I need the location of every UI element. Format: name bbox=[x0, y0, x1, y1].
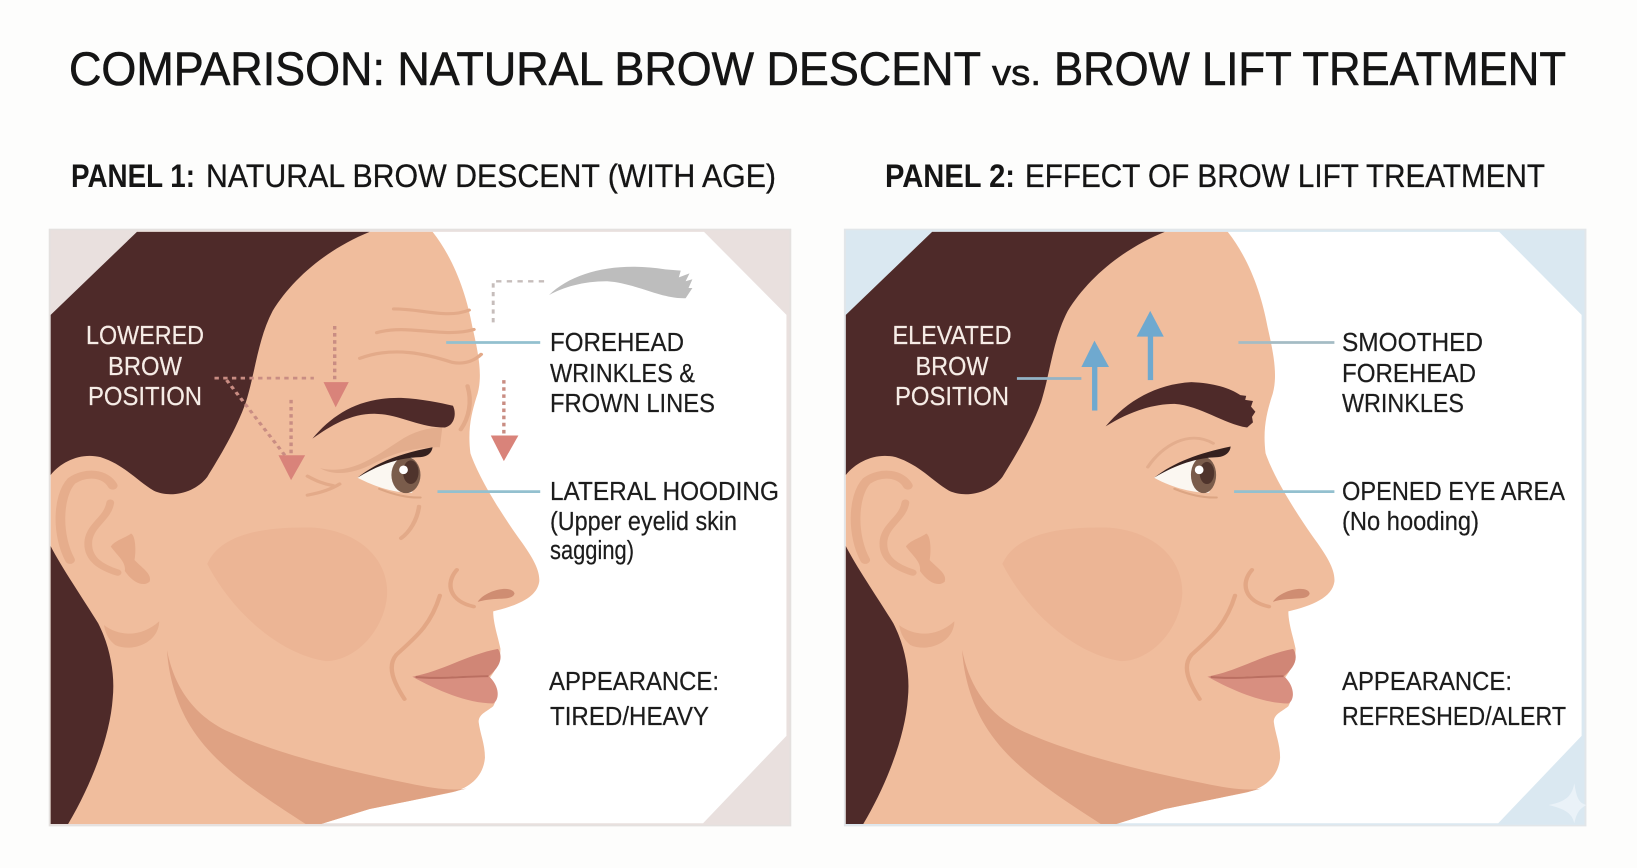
label: forehead wrinkles and frown lines: FROWN LINES bbox=[550, 390, 715, 418]
eyebrow bbox=[312, 398, 455, 439]
eye white bbox=[1154, 457, 1209, 493]
panel 1 white area bbox=[51, 232, 786, 823]
face skin bbox=[51, 232, 539, 824]
sparkle mark bbox=[1549, 783, 1586, 823]
label: smoothed forehead wrinkles bbox=[1342, 329, 1483, 418]
title: BROW LIFT TREATMENT bbox=[1054, 42, 1566, 95]
lower lid bbox=[379, 489, 420, 498]
neck shadow bbox=[167, 650, 467, 824]
pupil bbox=[403, 460, 419, 484]
label: elevated brow position: ELEVATED bbox=[892, 322, 1012, 350]
ear outer fold bbox=[60, 475, 113, 560]
label: forehead wrinkles and frown lines: FOREHEAD bbox=[550, 329, 684, 357]
lower hair bbox=[51, 546, 113, 824]
lifted eyebrow bbox=[1106, 382, 1255, 428]
highlight bbox=[399, 465, 408, 474]
face illustration bbox=[846, 232, 1334, 824]
nasolabial fold bbox=[392, 596, 440, 699]
label: smoothed forehead wrinkles: WRINKLES bbox=[1342, 390, 1464, 418]
panel 2: effect of brow lift bbox=[845, 229, 1586, 826]
face illustration bbox=[51, 232, 539, 824]
label: lateral hooding: sagging) bbox=[550, 537, 634, 565]
cheek bbox=[207, 527, 387, 661]
panel 1 background bbox=[50, 229, 790, 826]
panel 1 labels bbox=[86, 322, 779, 731]
title: vs. bbox=[992, 52, 1041, 93]
pupil bbox=[1200, 462, 1214, 484]
heading: panel 2: PANEL 2: bbox=[885, 158, 1015, 194]
nostril bbox=[478, 589, 515, 602]
panel 2 white area bbox=[846, 232, 1582, 823]
eye bbox=[357, 447, 433, 498]
label: opened eye area: (No hooding) bbox=[1342, 508, 1479, 536]
lower lip bbox=[412, 676, 498, 703]
panel 1: natural brow descent bbox=[50, 229, 790, 826]
label: lateral hooding bbox=[550, 478, 779, 565]
iris bbox=[1191, 457, 1216, 493]
label: opened eye area: OPENED EYE AREA bbox=[1342, 478, 1565, 506]
label: appearance refreshed/alert: APPEARANCE: bbox=[1342, 668, 1512, 696]
grey dashed connector bbox=[493, 281, 544, 325]
eye white bbox=[357, 457, 412, 493]
eyeliner bbox=[1154, 447, 1231, 478]
red arrows and dotted guides bbox=[214, 326, 504, 455]
label: appearance tired/heavy: TIRED/HEAVY bbox=[550, 703, 709, 731]
highlight bbox=[1195, 465, 1204, 474]
blue up arrows bbox=[1081, 311, 1164, 411]
panel 2 labels bbox=[892, 322, 1566, 731]
label: elevated brow position: BROW bbox=[916, 353, 988, 381]
leader lines bbox=[1017, 343, 1334, 492]
label: appearance tired/heavy: APPEARANCE: bbox=[549, 668, 719, 696]
upper eyelid hooding bbox=[320, 428, 442, 473]
ear inner fold bbox=[88, 503, 118, 573]
nose lines bbox=[450, 570, 474, 607]
panel 2 background bbox=[845, 229, 1585, 826]
label: forehead wrinkles and frown lines bbox=[550, 329, 715, 418]
title: COMPARISON: NATURAL BROW DESCENT bbox=[69, 42, 981, 95]
label: appearance refreshed/alert: REFRESHED/ALERT bbox=[1342, 703, 1566, 731]
eyelid crease bbox=[1148, 438, 1213, 467]
label: elevated brow position: POSITION bbox=[895, 383, 1009, 411]
label: opened eye area bbox=[1342, 478, 1565, 536]
label: lateral hooding: (Upper eyelid skin bbox=[550, 508, 737, 536]
ear concha bbox=[111, 533, 150, 584]
forehead wrinkles bbox=[308, 309, 481, 538]
label: appearance tired/heavy bbox=[549, 668, 719, 731]
label: lowered brow position: BROW bbox=[108, 353, 182, 381]
label: lowered brow position: POSITION bbox=[88, 383, 202, 411]
lower lid bbox=[1174, 489, 1217, 498]
iris bbox=[391, 457, 420, 493]
ear bbox=[60, 475, 118, 573]
eye bbox=[1154, 447, 1231, 498]
label: appearance refreshed/alert bbox=[1342, 668, 1566, 731]
heading: panel 2: EFFECT OF BROW LIFT TREATMENT bbox=[1025, 158, 1545, 194]
earlobe shadow bbox=[104, 621, 159, 648]
label: smoothed forehead wrinkles: FOREHEAD bbox=[1342, 360, 1476, 388]
title bbox=[69, 42, 1566, 95]
ghost eyebrow original position bbox=[549, 267, 692, 298]
arrowheads bbox=[278, 382, 518, 480]
eyeliner bbox=[357, 447, 433, 478]
heading: panel 1: NATURAL BROW DESCENT (WITH AGE) bbox=[206, 158, 776, 194]
heading: panel 1: PANEL 1: bbox=[71, 158, 195, 194]
label: elevated brow position bbox=[892, 322, 1012, 411]
label: smoothed forehead wrinkles: SMOOTHED bbox=[1342, 329, 1483, 357]
label: forehead wrinkles and frown lines: WRINKLES & bbox=[550, 360, 695, 388]
lip line bbox=[416, 676, 488, 678]
label: lateral hooding: LATERAL HOODING bbox=[550, 478, 779, 506]
lips bbox=[412, 649, 501, 677]
label: lowered brow position: LOWERED bbox=[86, 322, 204, 350]
label: lowered brow position bbox=[86, 322, 204, 411]
leader lines bbox=[437, 343, 540, 492]
hair bbox=[51, 232, 370, 494]
